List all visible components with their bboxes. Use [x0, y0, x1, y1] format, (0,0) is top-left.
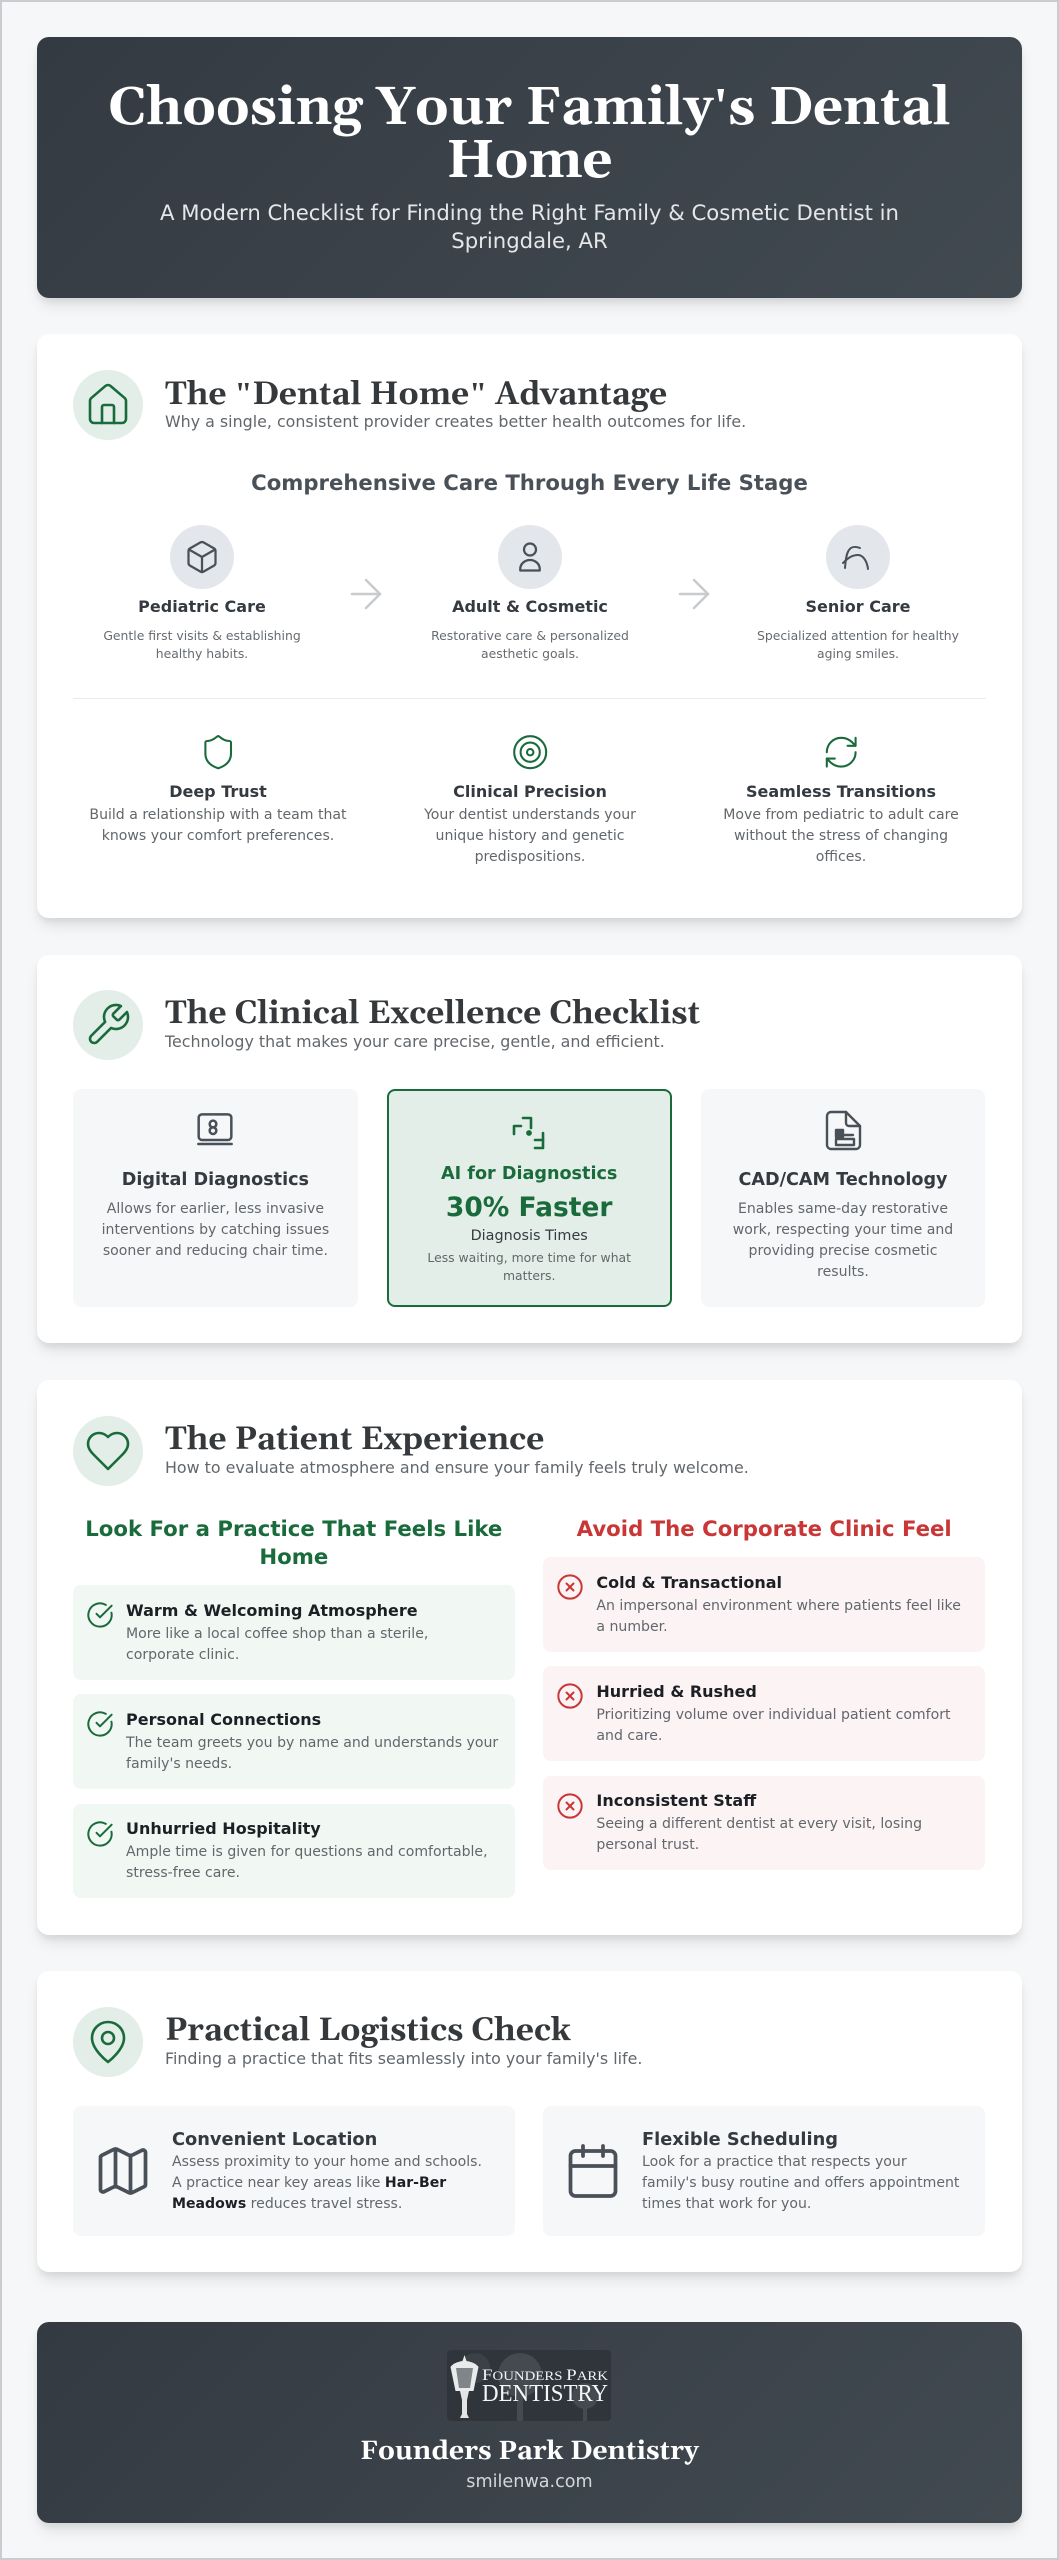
stage text: adult: aesthetic goals.	[481, 646, 579, 661]
icon: scan	[512, 1116, 544, 1150]
icon: box	[170, 525, 234, 589]
card title: Flexible Scheduling	[642, 2128, 838, 2150]
column heading: look for: Look For a Practice That Feels Like	[85, 1516, 502, 1542]
card text	[102, 1200, 329, 1259]
item text	[126, 1626, 428, 1663]
icon: house	[73, 370, 143, 440]
subheading: How to evaluate atmosphere and ensure your family feels truly welcome.	[165, 1458, 749, 1477]
benefit text: clinical precision: unique history and genetic	[436, 828, 624, 844]
stage text: pediatric: healthy habits.	[156, 646, 248, 661]
icon: file	[826, 1110, 862, 1150]
panel: dental home advantage	[37, 334, 1022, 918]
icon: check	[87, 1821, 113, 1847]
item text: Prioritizing volume over individual patient comfort	[596, 1707, 951, 1723]
title: Home	[446, 129, 613, 196]
heading: The "Dental Home" Advantage	[165, 374, 667, 415]
benefit title: seamless transitions: Seamless Transitions	[746, 782, 936, 801]
stage text: pediatric	[103, 628, 301, 661]
card text	[427, 1250, 631, 1283]
card text	[172, 2154, 482, 2212]
card: flexible scheduling	[543, 2106, 985, 2236]
item: inconsistent staff	[543, 1776, 985, 1870]
benefit title: clinical precision: Clinical Precision	[453, 782, 607, 801]
benefit text: seamless transitions: Move from pediatric to adult care	[723, 806, 959, 822]
card text: providing precise cosmetic	[749, 1243, 937, 1259]
card text: matters.	[503, 1268, 555, 1283]
card title: Convenient Location	[172, 2128, 377, 2150]
stage text: adult: Restorative care & personalized	[431, 628, 629, 643]
card text: Less waiting, more time for what	[427, 1250, 631, 1265]
item text: corporate clinic.	[126, 1647, 239, 1663]
item text: a number.	[596, 1619, 668, 1635]
benefit text: deep trust: knows your comfort preferences.	[102, 828, 334, 844]
logo	[447, 2350, 611, 2421]
item text: and care.	[596, 1728, 662, 1744]
subheading: Why a single, consistent provider creates better health outcomes for life.	[165, 412, 746, 431]
title	[108, 76, 951, 196]
heading: The Clinical Excellence Checklist	[165, 993, 700, 1034]
item text	[126, 1735, 498, 1772]
subheading: Finding a practice that fits seamlessly into your family's life.	[165, 2049, 642, 2068]
subheading: Technology that makes your care precise, gentle, and efficient.	[165, 1032, 665, 1051]
item text	[596, 1598, 961, 1635]
icon: x circle	[557, 1683, 583, 1709]
card: cad cam technology	[701, 1089, 985, 1307]
card text: Allows for earlier, less invasive	[107, 1200, 324, 1216]
card text: Meadows reduces travel stress.	[172, 2196, 402, 2212]
arrow	[678, 578, 710, 610]
card text: work, respecting your time and	[733, 1222, 953, 1238]
item: unhurried hospitality	[73, 1804, 515, 1898]
card: digital diagnostics	[73, 1089, 358, 1307]
icon: calendar	[568, 2144, 618, 2198]
item title: Personal Connections	[126, 1710, 321, 1729]
icon: laptop	[197, 1113, 233, 1146]
stage text: adult	[431, 628, 629, 661]
card: ai for diagnostics highlight	[387, 1089, 672, 1307]
footer name: Founders Park Dentistry	[360, 2435, 699, 2469]
header banner	[37, 37, 1022, 298]
benefit text: clinical precision	[424, 806, 636, 865]
subtitle	[160, 200, 899, 253]
card text: Assess proximity to your home and schools.	[172, 2154, 482, 2170]
item title: Warm & Welcoming Atmosphere	[126, 1600, 418, 1620]
item text: Seeing a different dentist at every visit, losing	[596, 1816, 922, 1832]
card text: A practice near key areas like Har-Ber	[172, 2175, 446, 2191]
item title: Unhurried Hospitality	[126, 1819, 321, 1838]
life stage heading: Comprehensive Care Through Every Life Stage	[251, 470, 808, 494]
footer	[37, 2322, 1022, 2523]
card text: times that work for you.	[642, 2196, 811, 2212]
item title: Hurried & Rushed	[596, 1682, 757, 1701]
item text	[596, 1816, 922, 1853]
item text: More like a local coffee shop than a sterile,	[126, 1626, 428, 1642]
icon: wrench	[73, 990, 143, 1060]
icon: x circle	[557, 1793, 583, 1819]
icon: refresh	[826, 736, 857, 768]
card title: AI for Diagnostics	[441, 1164, 617, 1184]
footer website: smilenwa.com	[466, 2472, 593, 2492]
panel: clinical excellence checklist	[37, 955, 1022, 1343]
item text: An impersonal environment where patients feel like	[596, 1598, 961, 1614]
card title: Digital Diagnostics	[122, 1170, 309, 1190]
icon: check	[87, 1711, 113, 1737]
heading: The Patient Experience	[165, 1419, 544, 1460]
statistic: 30% Faster	[446, 1192, 612, 1223]
item: warm atmosphere	[73, 1585, 515, 1680]
subtitle: A Modern Checklist for Finding the Right Family & Cosmetic Dentist in	[160, 200, 899, 225]
column heading: avoid: Avoid The Corporate Clinic Feel	[577, 1516, 952, 1542]
card text	[642, 2154, 960, 2212]
item text	[126, 1844, 488, 1881]
stage text: pediatric: Gentle first visits & establishing	[103, 628, 301, 643]
title: Choosing Your Family's Dental	[108, 76, 951, 143]
item text	[596, 1707, 951, 1744]
icon: x circle	[557, 1574, 583, 1600]
panel: practical logistics check	[37, 1971, 1022, 2272]
benefit text: seamless transitions	[723, 806, 959, 865]
benefit title: deep trust: Deep Trust	[169, 782, 267, 801]
icon: map pin	[73, 2007, 143, 2077]
benefit text: clinical precision: Your dentist understands your	[424, 806, 636, 822]
item title: Inconsistent Staff	[596, 1791, 756, 1810]
card text: Enables same-day restorative	[738, 1200, 948, 1216]
stage text: senior: aging smiles.	[817, 646, 899, 661]
benefit text: seamless transitions: offices.	[816, 849, 866, 865]
heading: Practical Logistics Check	[165, 2010, 571, 2051]
card text: results.	[817, 1264, 869, 1280]
icon: senior	[826, 525, 890, 589]
item text: personal trust.	[596, 1837, 699, 1853]
card text	[733, 1200, 953, 1280]
card: convenient location	[73, 2106, 515, 2236]
card title: CAD/CAM Technology	[738, 1170, 948, 1190]
item: cold and transactional	[543, 1557, 985, 1652]
card text: sooner and reducing chair time.	[103, 1243, 328, 1259]
logo: FOUNDERS PARK	[482, 2367, 608, 2384]
icon: map	[98, 2147, 148, 2195]
icon: user	[498, 525, 562, 589]
benefit text: deep trust: Build a relationship with a team that	[89, 806, 347, 822]
stage text: senior	[757, 628, 959, 661]
benefit text: deep trust	[89, 806, 347, 844]
item text: Ample time is given for questions and comfortable,	[126, 1844, 488, 1860]
icon: heart	[73, 1416, 143, 1486]
benefit text: clinical precision: predispositions.	[475, 849, 585, 865]
card text: interventions by catching issues	[102, 1222, 329, 1238]
card text: Look for a practice that respects your	[642, 2154, 907, 2170]
column heading: look for: Home	[259, 1544, 328, 1570]
stage title: pediatric: Pediatric Care	[138, 597, 266, 616]
benefit text: seamless transitions: without the stress of changing	[734, 828, 948, 844]
card text: family's busy routine and offers appointment	[642, 2175, 959, 2191]
panel: patient experience	[37, 1380, 1022, 1935]
arrow	[350, 578, 382, 610]
item: personal connections	[73, 1694, 515, 1789]
stage text: senior: Specialized attention for healthy	[757, 628, 959, 643]
column heading: look for	[85, 1516, 502, 1570]
item text: The team greets you by name and understands your	[126, 1735, 498, 1751]
icon: target	[513, 735, 548, 770]
stage title: senior: Senior Care	[806, 597, 910, 616]
item title: Cold & Transactional	[596, 1572, 782, 1592]
subtitle: Springdale, AR	[451, 228, 608, 253]
icon: shield	[204, 735, 232, 770]
item text: stress-free care.	[126, 1865, 240, 1881]
item: hurried and rushed	[543, 1666, 985, 1761]
statistic label: Diagnosis Times	[471, 1228, 588, 1244]
logo: DENTISTRY	[482, 2381, 608, 2407]
stage title: adult: Adult & Cosmetic	[452, 597, 608, 616]
item text: family's needs.	[126, 1756, 232, 1772]
icon: check	[87, 1602, 113, 1628]
